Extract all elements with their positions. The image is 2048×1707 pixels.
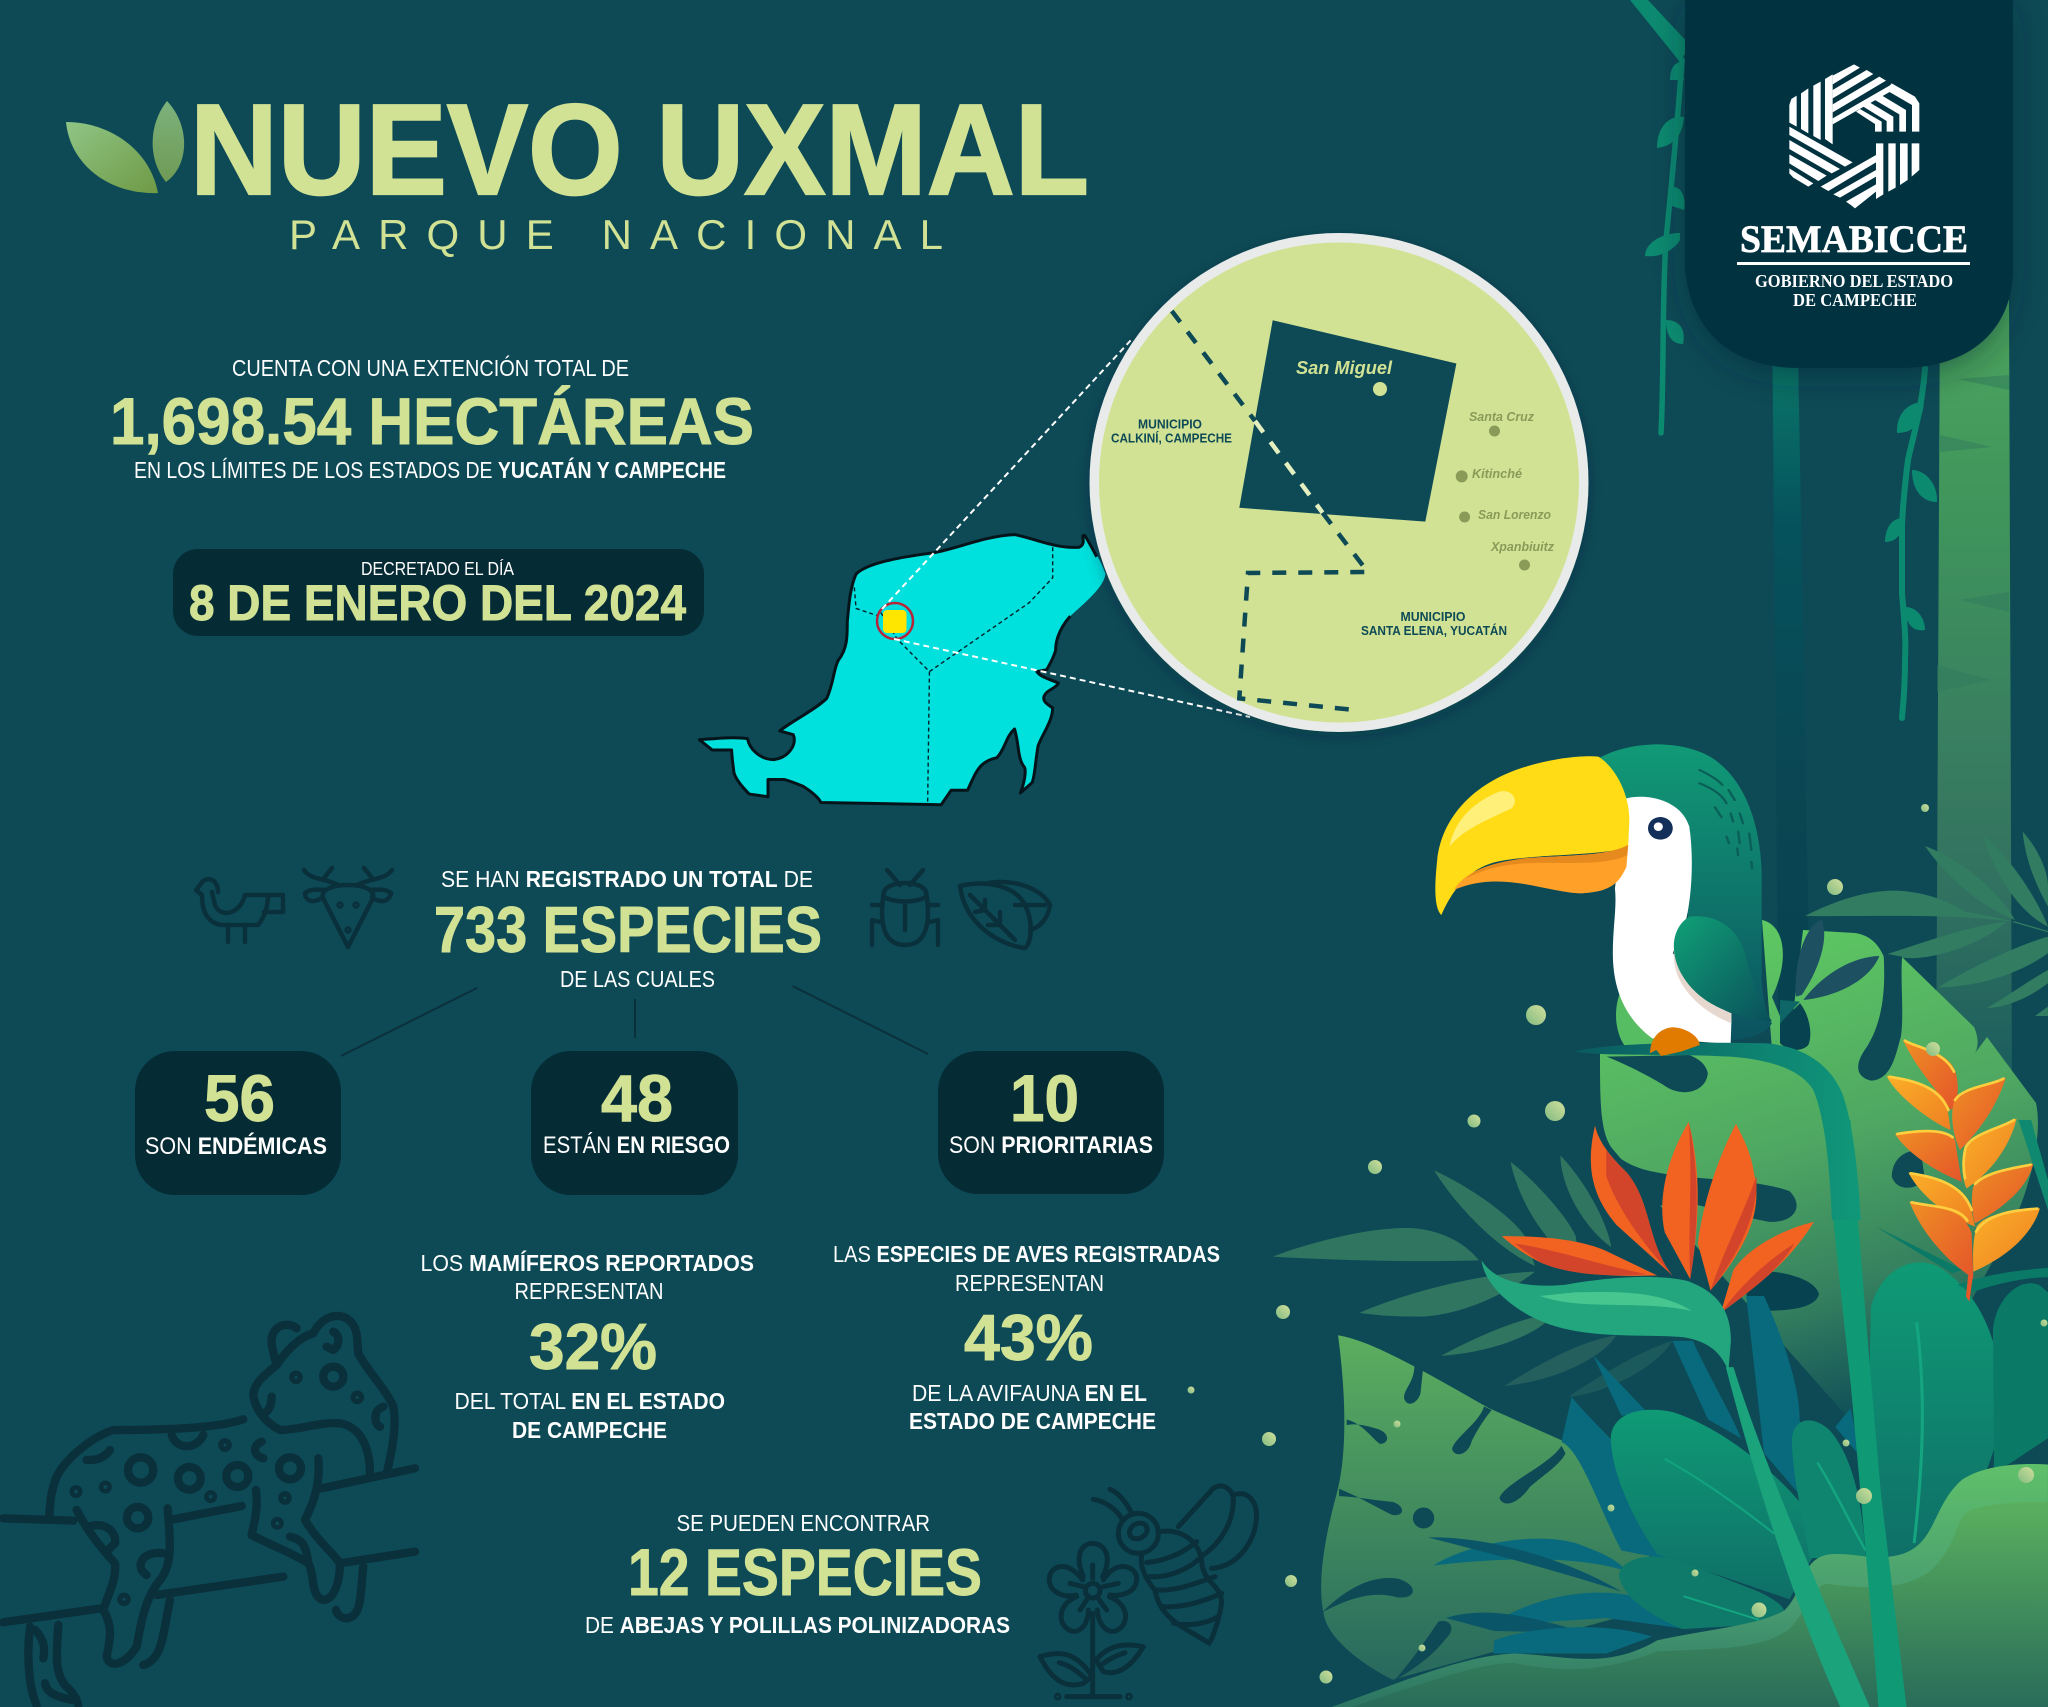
wing shadow xyxy=(1674,947,1731,1023)
palm leaves: lower centre xyxy=(1273,1156,1672,1397)
teal foliage xyxy=(1428,1296,1861,1654)
map inset circle: Xpanbiuitz xyxy=(1490,540,1555,554)
logo hexagon mark xyxy=(1789,64,1919,208)
icon: leaf xyxy=(960,882,1050,948)
vine: right xyxy=(1885,368,1937,718)
light tree trunk xyxy=(1936,300,2012,1100)
heliconia flower xyxy=(1887,1039,2040,1302)
wing xyxy=(1674,916,1772,1022)
monstera slits xyxy=(1607,953,1925,1188)
block: mammals xyxy=(420,1249,754,1443)
bird of paradise flower xyxy=(1482,1122,1814,1371)
round leaves xyxy=(1611,1120,2048,1629)
title: NUEVO UXMAL xyxy=(190,78,1089,222)
block: pollinators: SE PUEDEN ENCONTRAR xyxy=(676,1510,930,1536)
species outro text: DE LAS CUALES xyxy=(560,966,715,992)
panel: endemic species: SON ENDÉMICAS xyxy=(145,1132,327,1160)
map inset circle: San Lorenzo xyxy=(1478,508,1551,522)
panel: endemic species: 56 xyxy=(204,1061,275,1135)
block: extension: CUENTA CON UNA EXTENCIÓN TOTAL DE xyxy=(232,355,629,381)
species intro text: SE HAN REGISTRADO UN TOTAL DE xyxy=(441,866,813,892)
panel: priority species xyxy=(938,1051,1164,1194)
panel: decree date xyxy=(173,549,704,636)
jungle illustration xyxy=(1273,0,2048,1707)
species figure: 733 ESPECIES xyxy=(434,893,822,966)
sheath xyxy=(1482,1260,1731,1371)
toucan chest xyxy=(1613,797,1731,1044)
panel: species at risk: ESTÁN EN RIESGO xyxy=(543,1132,730,1159)
block: extension xyxy=(110,355,754,483)
map inset circle: MUNICIPIO xyxy=(1400,610,1466,624)
panel: decree date: 8 DE ENERO DEL 2024 xyxy=(189,575,686,631)
foot xyxy=(1650,1027,1700,1056)
flower xyxy=(1040,1543,1143,1698)
logo wordmark: SEMABICCE xyxy=(1740,218,1968,261)
logo panel xyxy=(1685,0,2013,368)
municipal boundary xyxy=(1172,311,1368,710)
bee xyxy=(1093,1486,1257,1643)
logo subtitle: GOBIERNO DEL ESTADO xyxy=(1755,271,1953,291)
icon: bee and flower xyxy=(1040,1486,1257,1698)
pollinators figure: 12 ESPECIES xyxy=(628,1535,982,1609)
hectares figure: 1,698.54 HECTÁREAS xyxy=(110,384,754,458)
monstera leaf: behind toucan xyxy=(1600,919,2038,1494)
decorative dots xyxy=(1188,804,2048,1684)
tall stalks xyxy=(1726,1120,1906,1707)
map: Yucatan peninsula xyxy=(699,535,1106,805)
block: mammals: DEL TOTAL EN EL ESTADO xyxy=(454,1388,725,1414)
block: birds: ESTADO DE CAMPECHE xyxy=(909,1408,1156,1434)
vine: top left xyxy=(1630,0,1690,433)
beak xyxy=(1435,756,1629,915)
block: birds: DE LA AVIFAUNA EN EL xyxy=(912,1380,1147,1406)
block: birds: REPRESENTAN xyxy=(955,1270,1104,1296)
icon: bird xyxy=(196,879,283,942)
icon: jaguar xyxy=(3,1316,415,1705)
panel: species at risk: 48 xyxy=(601,1061,673,1135)
petals xyxy=(1502,1122,1814,1313)
branch xyxy=(1574,1043,1861,1220)
block: extension: EN LOS LÍMITES DE LOS ESTADOS DE YUCATÁN Y CAMPECHE xyxy=(134,456,726,483)
zoom connector lines xyxy=(882,339,1250,717)
panel: species at risk xyxy=(531,1051,738,1195)
icon: beetle xyxy=(872,870,938,945)
birds percent: 43% xyxy=(964,1301,1093,1374)
park polygon xyxy=(1239,320,1456,522)
block: mammals: DE CAMPECHE xyxy=(512,1417,667,1443)
toucan body xyxy=(1598,744,1772,1040)
logo panel: DE CAMPECHE xyxy=(1793,290,1917,310)
map inset circle xyxy=(1090,233,1588,732)
ground hills xyxy=(1331,1464,2048,1707)
map inset circle: Kitinché xyxy=(1472,467,1522,481)
block: pollinators: DE ABEJAS Y POLILLAS POLINIZADORAS xyxy=(585,1612,1010,1638)
connector lines xyxy=(341,986,928,1056)
monstera leaf: lower left xyxy=(1321,1335,1657,1680)
icon: deer xyxy=(304,868,392,947)
eye xyxy=(1648,817,1673,840)
panel: priority species: 10 xyxy=(1010,1061,1079,1135)
block: mammals: REPRESENTAN xyxy=(514,1278,664,1304)
toucan xyxy=(1435,744,1861,1220)
map inset circle: MUNICIPIO xyxy=(1138,418,1202,432)
map inset circle: CALKINÍ, CAMPECHE xyxy=(1111,430,1232,446)
map inset circle: Santa Cruz xyxy=(1469,410,1535,424)
icon: leaves xyxy=(66,101,184,193)
block: pollinators xyxy=(585,1510,1010,1638)
panel: endemic species xyxy=(135,1051,341,1195)
block: mammals: LOS MAMÍFEROS REPORTADOS xyxy=(420,1249,754,1276)
panel: priority species: SON PRIORITARIAS xyxy=(949,1132,1153,1159)
palm leaves: upper right xyxy=(1805,832,2048,1016)
block: birds: LAS ESPECIES DE AVES REGISTRADAS xyxy=(833,1241,1220,1267)
panel: decree date: DECRETADO EL DÍA xyxy=(361,559,514,579)
feathers xyxy=(1700,770,1752,868)
map inset circle: SANTA ELENA, YUCATÁN xyxy=(1361,623,1507,638)
subtitle: PARQUE NACIONAL xyxy=(289,211,943,258)
map labels: San Miguel xyxy=(1296,358,1393,378)
dark tree trunk xyxy=(1772,300,1810,1010)
mammals percent: 32% xyxy=(529,1310,657,1383)
map: park marker xyxy=(877,603,913,639)
block: birds xyxy=(833,1241,1220,1434)
